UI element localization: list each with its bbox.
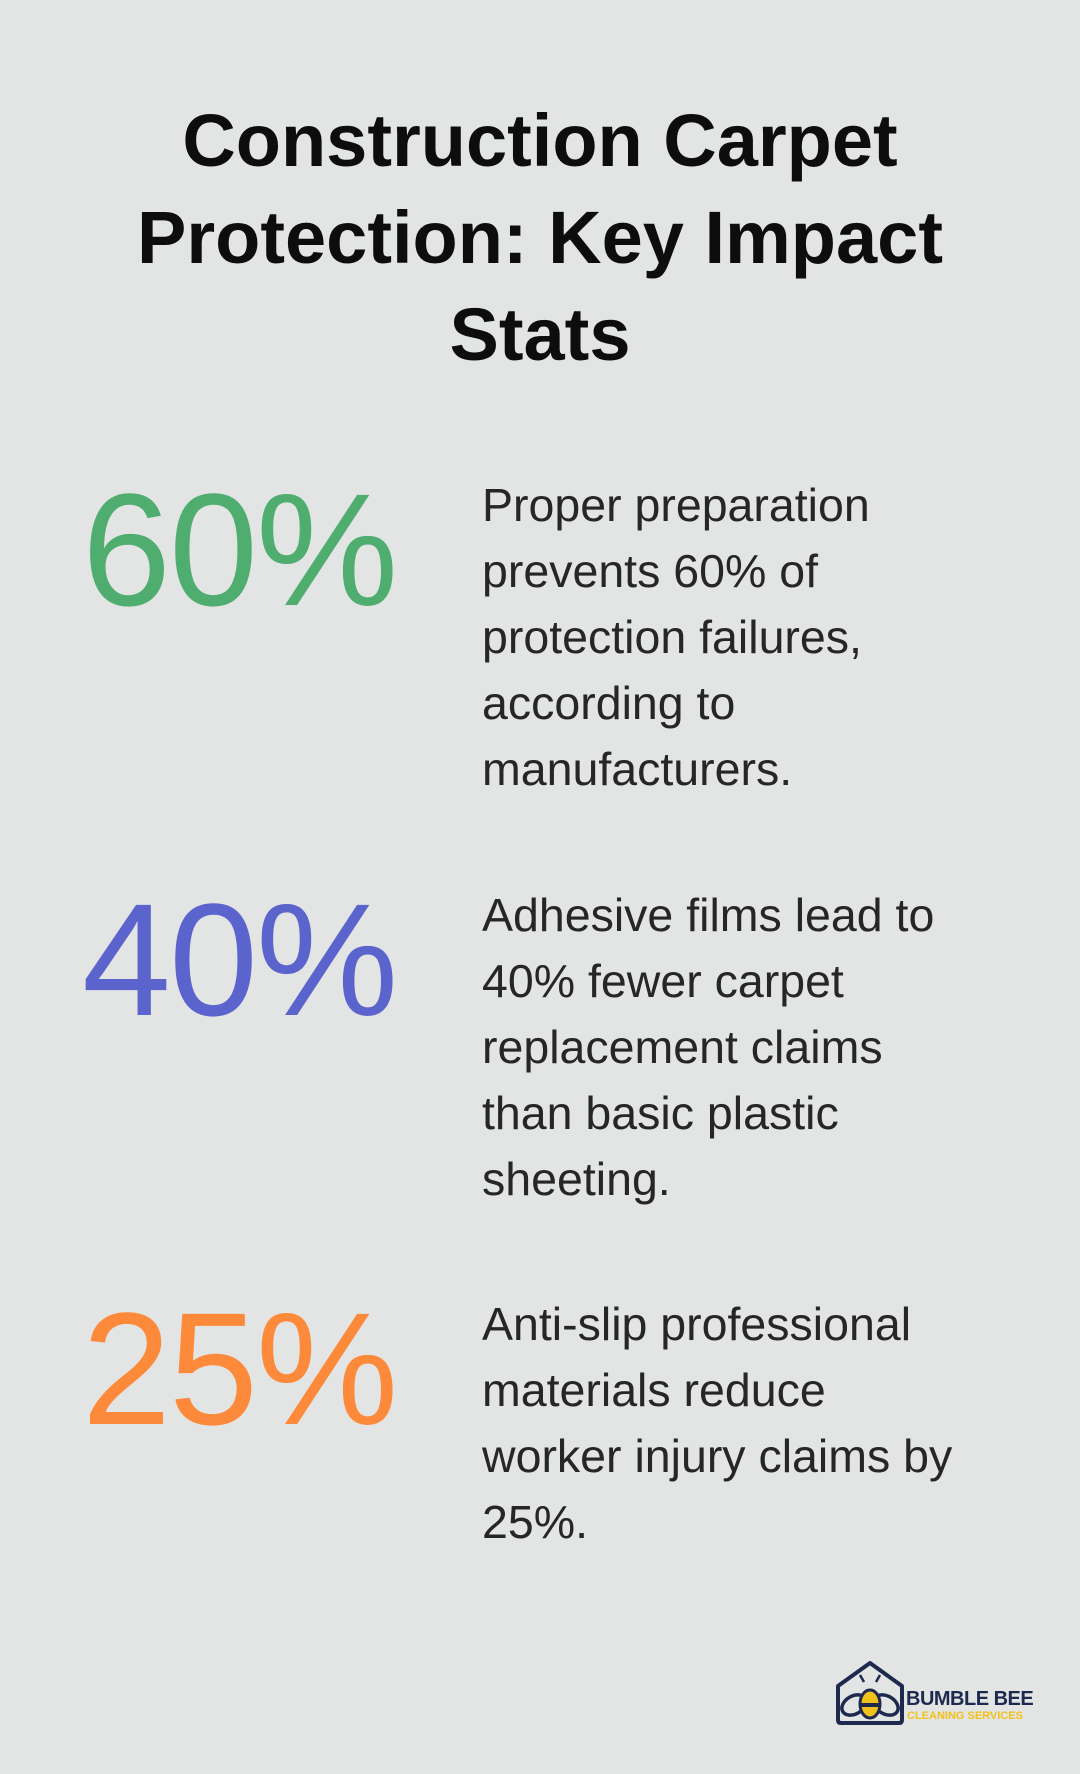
stat description 3: worker injury claims by [482, 1430, 952, 1482]
logo: CLEANING SERVICES [907, 1710, 1023, 1722]
stat description 1: protection failures, [482, 611, 862, 663]
stat description 2: Adhesive films lead to [482, 889, 934, 941]
stat block 2 [82, 870, 934, 1205]
stat description 2 [482, 889, 934, 1205]
logo [836, 1661, 1033, 1725]
stat description 3 [482, 1298, 952, 1548]
stat description 1: manufacturers. [482, 743, 792, 795]
title: Protection: Key Impact [137, 196, 943, 279]
title: Stats [450, 293, 630, 376]
stat block 3 [82, 1279, 952, 1548]
stat description 3: 25%. [482, 1496, 588, 1548]
stat description 2: 40% fewer carpet [482, 955, 844, 1007]
stat description 1 [482, 479, 870, 795]
stat description 2: replacement claims [482, 1021, 883, 1073]
icon: bee house [836, 1661, 904, 1725]
stat description 3: materials reduce [482, 1364, 826, 1416]
title: Construction Carpet [182, 99, 898, 182]
stat number 40%: 40% [82, 870, 396, 1049]
stat number 25%: 25% [82, 1279, 396, 1458]
stat description 2: than basic plastic [482, 1087, 839, 1139]
stat block 1 [82, 460, 870, 795]
stat number 60%: 60% [82, 460, 396, 639]
title [137, 99, 943, 376]
stat description 3: Anti-slip professional [482, 1298, 911, 1350]
stat description 1: according to [482, 677, 735, 729]
stat description 1: prevents 60% of [482, 545, 818, 597]
stat description 2: sheeting. [482, 1153, 671, 1205]
logo text: BUMBLE BEE [906, 1688, 1033, 1710]
stat description 1: Proper preparation [482, 479, 870, 531]
